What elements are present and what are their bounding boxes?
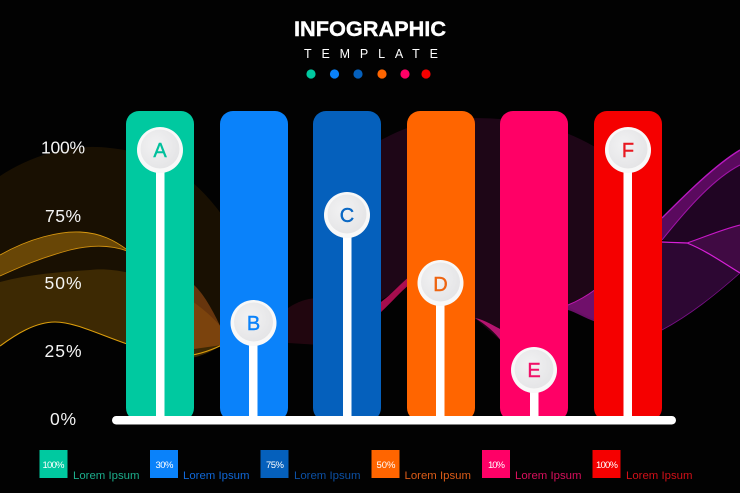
bar A: A: [153, 140, 167, 162]
legend C: Lorem Ipsum: [294, 470, 360, 482]
legend B: 30%: [156, 460, 174, 471]
bar C: C: [340, 205, 354, 227]
y axis labels: 100%: [41, 138, 85, 158]
bar B: B: [247, 313, 260, 335]
bar D: D: [433, 274, 448, 296]
y axis labels: 0%: [50, 409, 76, 429]
legend C: 75%: [266, 460, 285, 471]
y axis labels: 50%: [44, 273, 82, 293]
bar C: [313, 111, 381, 421]
bar E: E: [527, 360, 541, 382]
bar A: [126, 111, 194, 421]
decorative wave: gold, left: [0, 147, 222, 359]
bar E: [500, 111, 568, 421]
bar B: [220, 111, 288, 421]
bar D: [407, 111, 475, 421]
legend F: Lorem Ipsum: [626, 470, 692, 482]
legend F: 100%: [596, 460, 619, 471]
title: [294, 18, 446, 61]
title: INFOGRAPHIC: [294, 18, 446, 41]
legend B: [150, 450, 250, 482]
legend E: 10%: [488, 460, 506, 471]
legend D: [372, 450, 471, 482]
legend A: 100%: [42, 460, 65, 471]
y axis labels: 75%: [45, 206, 81, 226]
legend A: [40, 450, 140, 482]
y axis labels: [41, 138, 85, 429]
legend E: Lorem Ipsum: [515, 470, 582, 482]
legend B: Lorem Ipsum: [183, 470, 250, 482]
bar F: F: [622, 140, 634, 162]
y axis labels: 25%: [44, 341, 82, 361]
legend D: Lorem Ipsum: [404, 470, 471, 482]
decorative wave: magenta, centre and right: [288, 118, 740, 345]
legend F: [592, 450, 692, 482]
legend E: [482, 450, 582, 482]
bar F: [594, 111, 662, 421]
baseline axis: [112, 416, 676, 424]
subtitle: TEMPLATE: [304, 47, 438, 61]
legend C: [260, 450, 360, 482]
colour dots: [306, 69, 431, 79]
legend D: 50%: [376, 460, 396, 471]
legend A: Lorem Ipsum: [73, 470, 140, 482]
